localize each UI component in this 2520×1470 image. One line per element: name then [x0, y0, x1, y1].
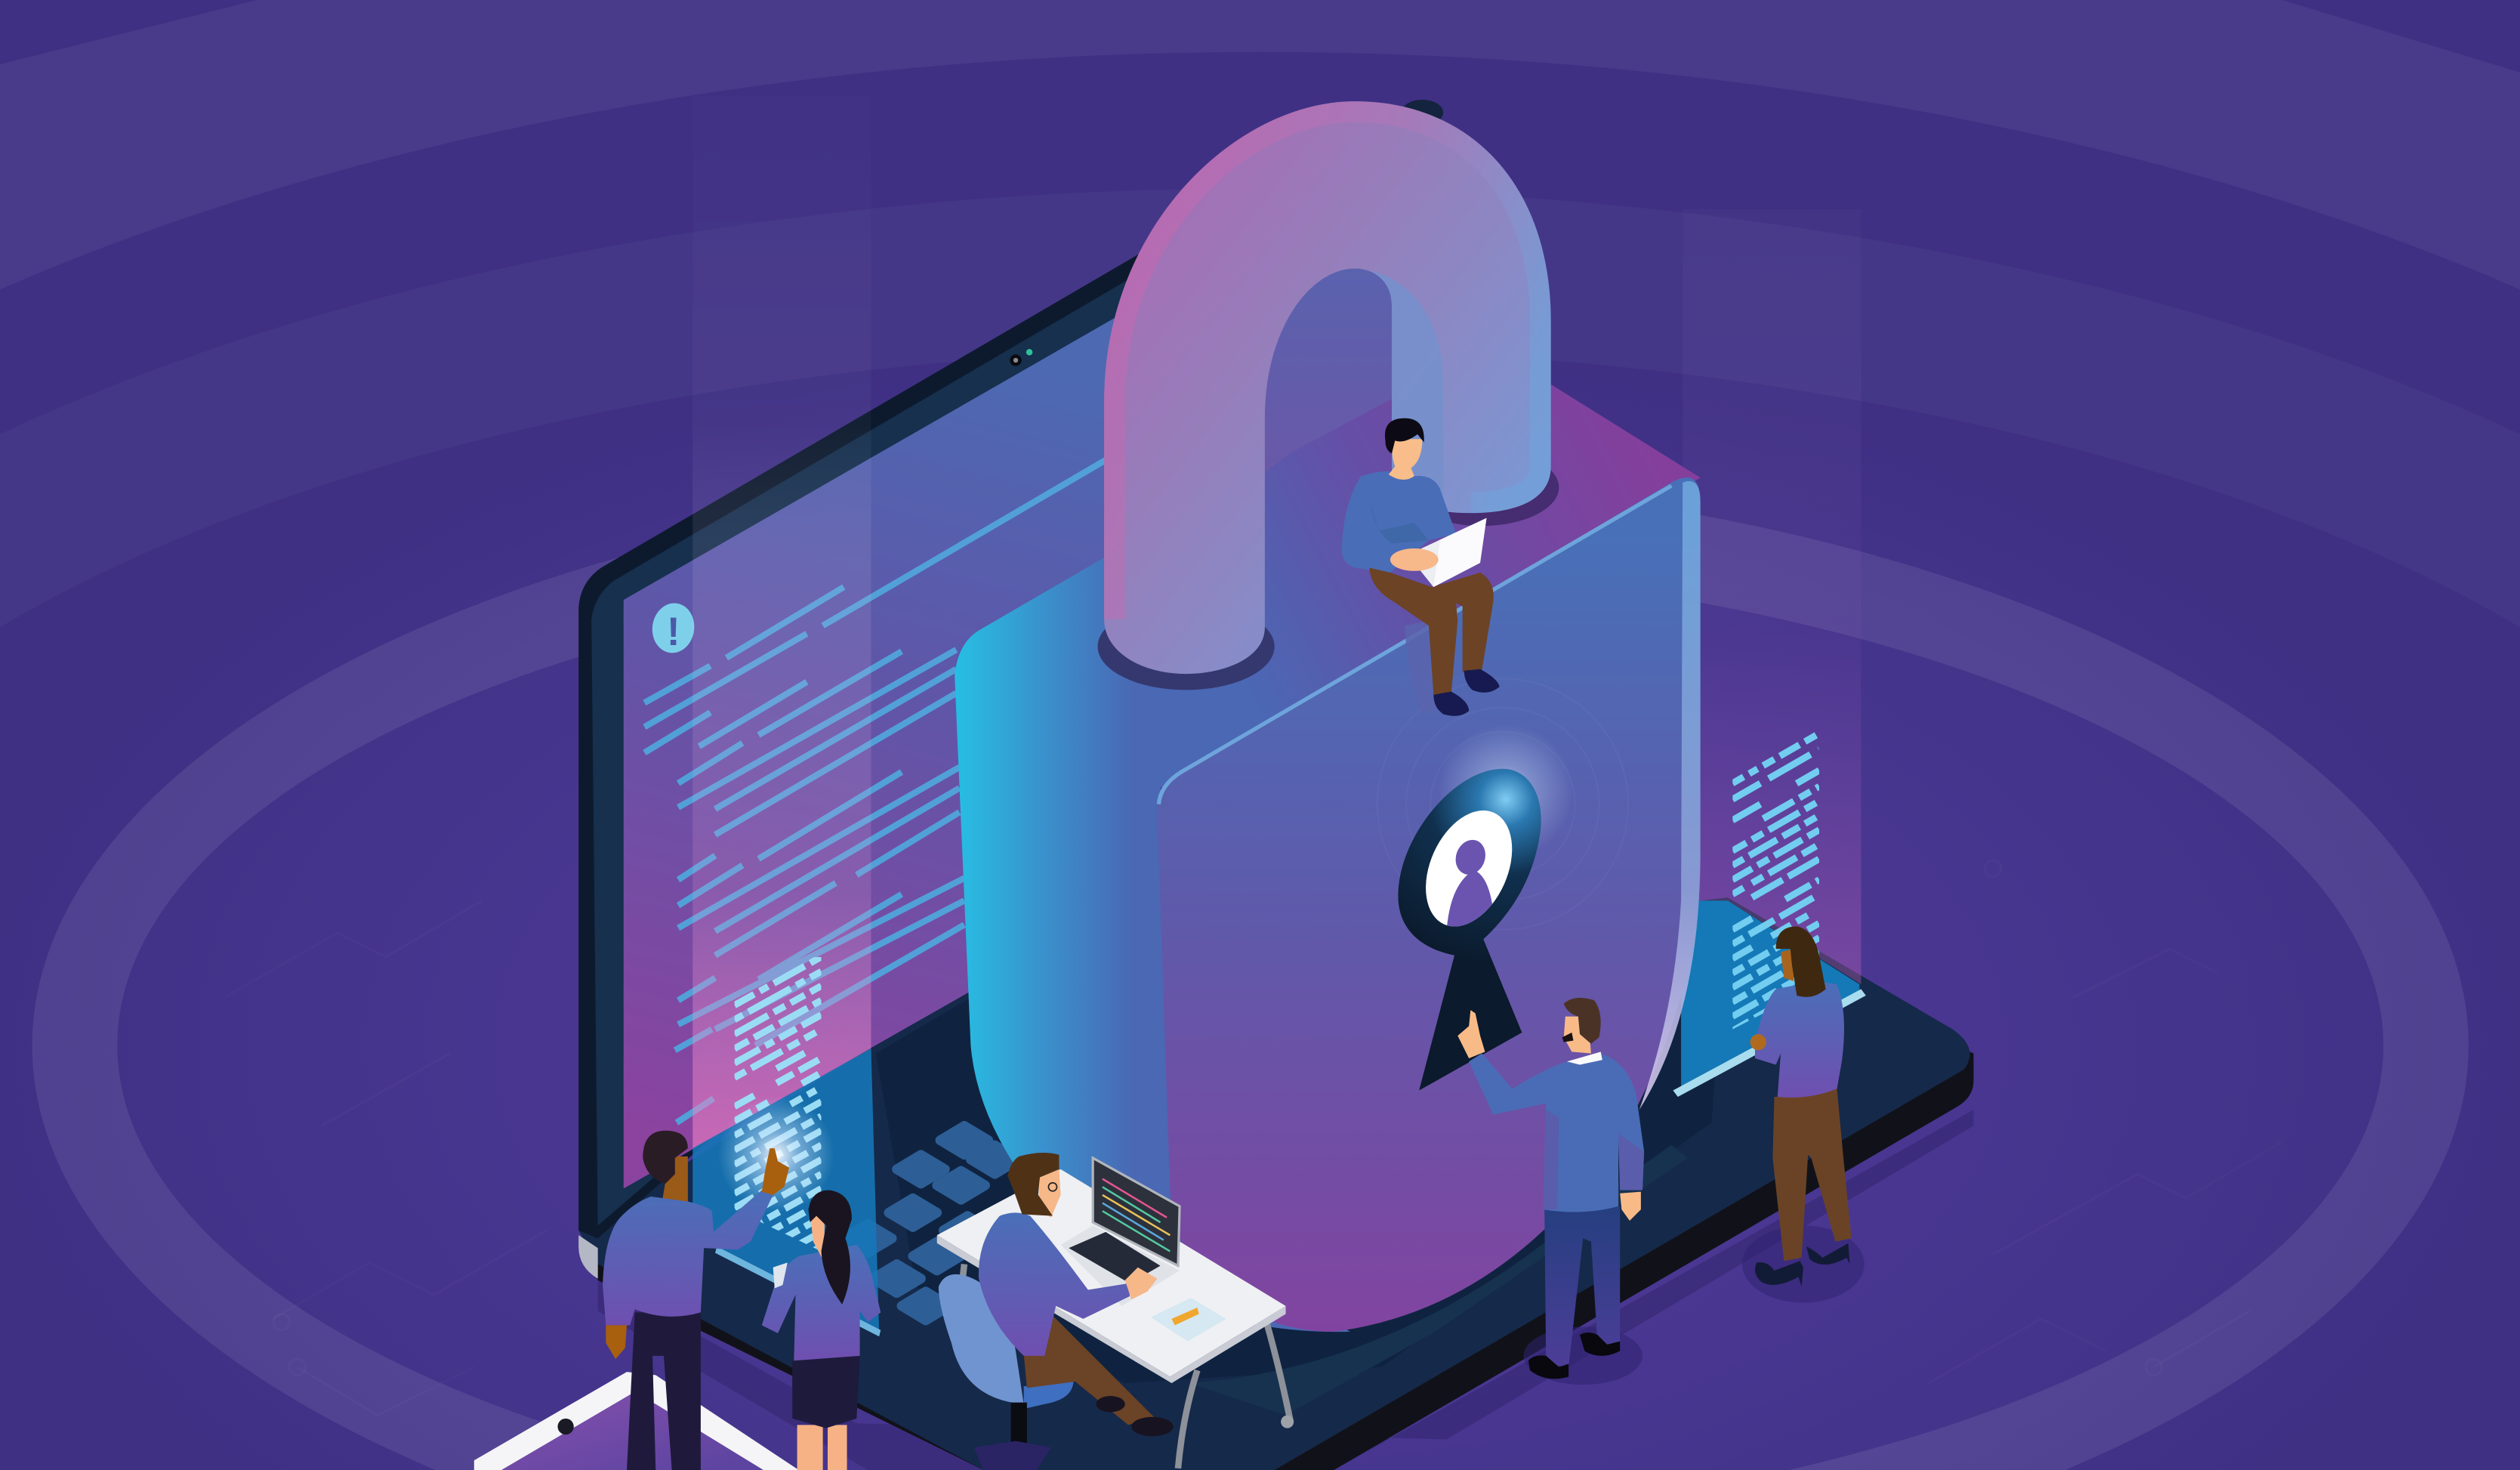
shackle rear cap [1402, 100, 1443, 125]
shackle [1104, 101, 1551, 674]
touch glow [718, 1097, 834, 1212]
woman in heels [1742, 926, 1865, 1303]
keyhole rings [1377, 678, 1628, 930]
laptop base [578, 897, 1973, 1470]
lid bezel [591, 270, 1144, 1225]
face [1038, 1169, 1061, 1218]
collar [1567, 1052, 1602, 1064]
desk laptop base [1061, 1225, 1180, 1306]
hair [1776, 926, 1826, 997]
jacket shade [1543, 1110, 1644, 1209]
trousers [1369, 568, 1494, 695]
front top edge highlight [1158, 486, 1671, 804]
left hologram base strip [715, 1246, 881, 1336]
left hologram base glow [692, 1048, 879, 1332]
left hologram code bricks [734, 957, 822, 1249]
shoes [1433, 669, 1500, 716]
circuit pattern [225, 860, 2282, 1416]
desk legs [960, 1264, 1291, 1468]
padlock top face [1029, 384, 1701, 788]
face [810, 1212, 825, 1262]
trousers [1024, 1316, 1154, 1425]
hair and beard [1007, 1153, 1059, 1216]
warning icon [649, 601, 698, 656]
shackle left foot shadow [1098, 603, 1275, 690]
tablet camera [557, 1419, 574, 1434]
shackle pink rim [1104, 101, 1551, 619]
face [1781, 949, 1794, 981]
padlock [955, 100, 1701, 1332]
trousers [1772, 1089, 1852, 1261]
shoes [1131, 1417, 1174, 1436]
glasses [1048, 1183, 1056, 1191]
hole backing [1125, 241, 1551, 675]
person sitting on the lock [1342, 418, 1500, 716]
raised hand [1457, 1010, 1485, 1058]
chair post and feet [1011, 1403, 1027, 1447]
trousers [1544, 1206, 1620, 1367]
top [1755, 981, 1844, 1098]
chair seat [1024, 1380, 1074, 1409]
raised hand [762, 1148, 789, 1195]
shirt [603, 1191, 773, 1325]
hand [1750, 1034, 1766, 1050]
base top surface [578, 897, 1970, 1470]
leg shadow [1405, 621, 1442, 714]
hair and ponytail [808, 1191, 852, 1305]
laptop base shadow [598, 1110, 1973, 1470]
neck and face [662, 1157, 688, 1201]
man at desk [939, 1153, 1174, 1470]
phone [773, 1262, 788, 1288]
sweater [1342, 471, 1456, 573]
trousers [627, 1312, 701, 1470]
keyhole user icon [1447, 840, 1492, 926]
skirt [792, 1354, 860, 1428]
desk top [937, 1169, 1286, 1377]
dark-skinned man pointing [603, 1131, 789, 1470]
right hologram base glow [1681, 900, 1859, 1094]
chair back [939, 1274, 1024, 1404]
keyboard keys [844, 1126, 1019, 1320]
heels [1755, 1243, 1850, 1286]
front face rim [1639, 481, 1701, 1110]
desk laptop screen [1093, 1158, 1180, 1266]
shackle right foot shadow [1405, 449, 1559, 526]
hair [643, 1131, 688, 1184]
keyhole [1398, 769, 1541, 1091]
code lines on screen [644, 460, 1106, 1123]
paper and eraser [1151, 1298, 1226, 1342]
laptop lid [578, 251, 1144, 1238]
warning icon: ! [667, 610, 680, 654]
band along lock [1189, 1145, 1688, 1416]
keyhole portrait [1409, 797, 1529, 940]
tablet on the floor [474, 1372, 799, 1470]
lower hand [606, 1325, 627, 1359]
neck and face [1389, 439, 1422, 480]
right hologram base strip [1673, 989, 1866, 1097]
keyhole glow [1439, 724, 1573, 859]
top [762, 1245, 881, 1360]
right hologram column [1683, 209, 1861, 984]
small laptop [1408, 518, 1487, 587]
laptop keyboard [1069, 1232, 1161, 1283]
hands [1390, 548, 1439, 571]
man in suit [1457, 998, 1644, 1385]
laptop screen [624, 312, 1125, 1188]
face [1564, 1017, 1591, 1054]
recessed zone under the lock [876, 900, 1728, 1383]
shadow [1742, 1225, 1865, 1303]
left hologram column [692, 97, 871, 1148]
sweater shade [1369, 500, 1429, 544]
hair [1385, 418, 1424, 453]
lower hand [1620, 1192, 1641, 1221]
shackle inner face [1369, 270, 1443, 507]
hand [1125, 1268, 1157, 1299]
shoes [1528, 1333, 1620, 1379]
shadow [1524, 1327, 1642, 1385]
woman with phone [762, 1191, 881, 1470]
moustache [1562, 1033, 1573, 1042]
laptop code lines [1103, 1179, 1170, 1251]
base hinge cap [578, 1235, 598, 1279]
legs [797, 1425, 847, 1470]
keyhole shape [1398, 769, 1541, 1091]
desk [937, 1158, 1294, 1468]
hair [1564, 998, 1601, 1044]
padlock front face [1157, 477, 1701, 1332]
shirt [979, 1212, 1130, 1356]
jacket [1469, 1054, 1644, 1212]
webcam [1010, 349, 1032, 366]
base side thickness [581, 965, 1973, 1470]
right hologram code bricks [1732, 733, 1819, 1031]
padlock left side [955, 555, 1350, 1332]
